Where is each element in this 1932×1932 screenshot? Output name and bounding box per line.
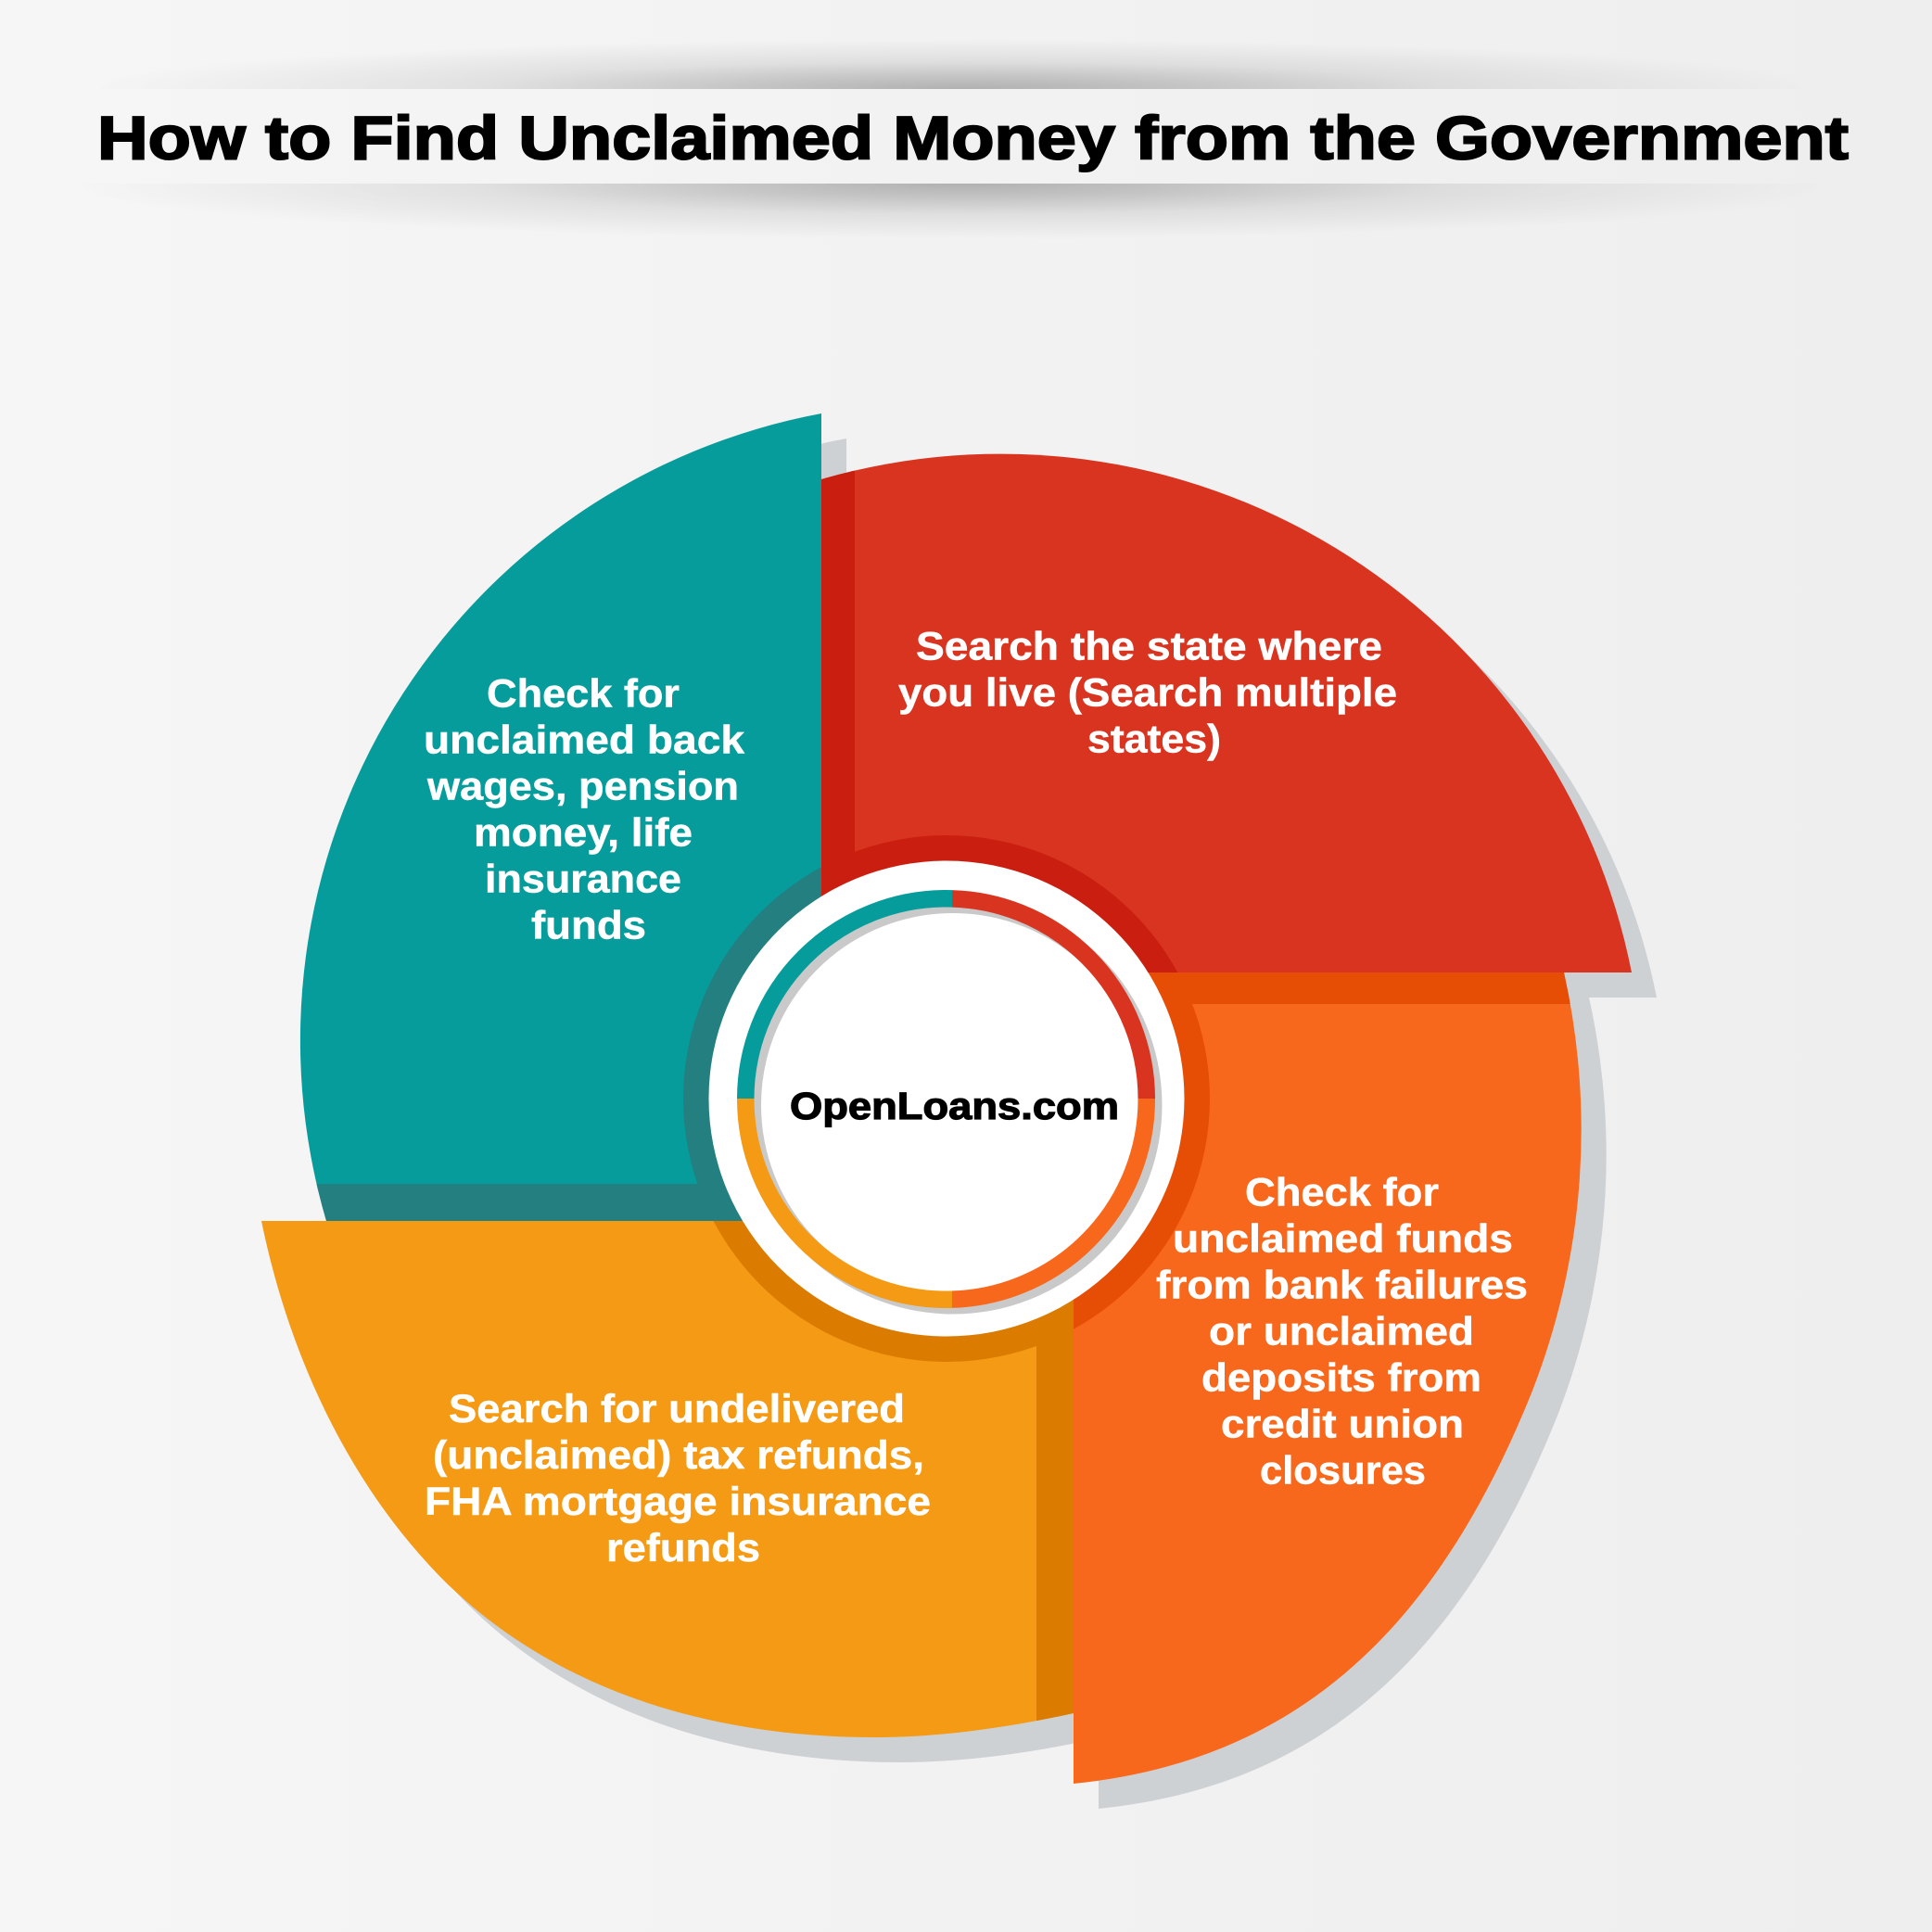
panel: orange segment, bank failures and credit unions xyxy=(1074,972,1582,1784)
text: teal segment: unclaimed back xyxy=(424,718,744,763)
text: yellow segment: refunds xyxy=(606,1526,760,1570)
center hub: white disc with coloured ring xyxy=(708,860,1185,1337)
text: teal segment: Check for xyxy=(487,672,680,717)
text: yellow segment: (unclaimed) tax refunds, xyxy=(433,1433,924,1478)
text: orange segment: deposits from xyxy=(1201,1356,1481,1401)
panel: yellow segment, tax and FHA refunds xyxy=(261,1221,1074,1737)
panel: teal segment, back wages and pensions xyxy=(300,413,821,1221)
text: red segment: Search the state where xyxy=(916,625,1382,669)
text: orange segment: Check for xyxy=(1245,1171,1439,1215)
center logo text: OpenLoans.com xyxy=(790,1085,1119,1127)
text: orange segment: from bank failures xyxy=(1156,1264,1528,1308)
text: teal segment: insurance xyxy=(485,858,681,902)
text: orange segment: or unclaimed xyxy=(1209,1310,1474,1354)
text: teal segment: wages, pension xyxy=(426,765,739,809)
text: yellow segment: Search for undelivered xyxy=(449,1387,905,1431)
text: teal segment: money, life xyxy=(474,811,693,856)
title: How to Find Unclaimed Money from the Government xyxy=(97,104,1849,172)
panel: red segment, state search xyxy=(821,454,1632,972)
segment drop shadows xyxy=(286,439,1657,1809)
text: red segment xyxy=(898,625,1397,762)
text: orange segment: unclaimed funds xyxy=(1173,1217,1513,1262)
text: teal segment xyxy=(424,672,744,948)
text: yellow segment xyxy=(425,1387,931,1570)
text: orange segment: credit union xyxy=(1221,1403,1464,1447)
text: orange segment xyxy=(1156,1171,1528,1493)
text: yellow segment: FHA mortgage insurance xyxy=(425,1480,931,1524)
text: teal segment: funds xyxy=(531,904,646,948)
text: red segment: states) xyxy=(1087,718,1221,762)
title band with soft shadows xyxy=(0,39,1932,239)
text: red segment: you live (Search multiple xyxy=(898,671,1397,716)
text: orange segment: closures xyxy=(1260,1449,1426,1493)
